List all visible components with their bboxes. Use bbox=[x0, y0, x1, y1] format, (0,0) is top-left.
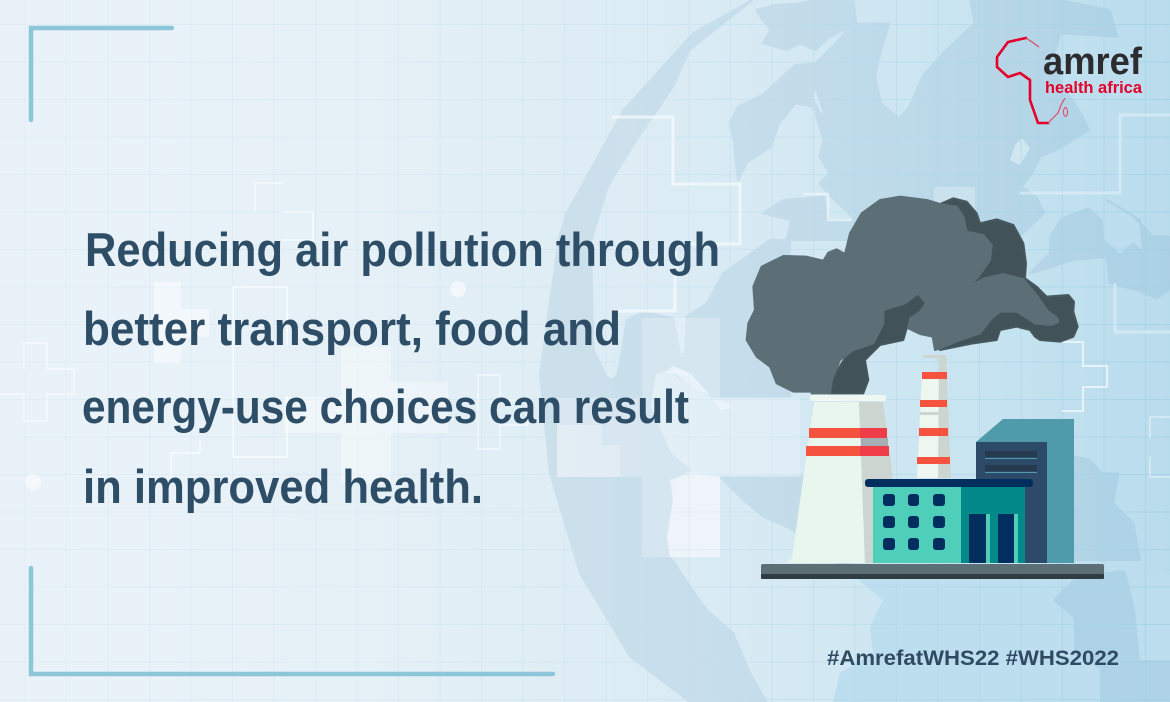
ireland and britain bbox=[1010, 138, 1030, 165]
logo: amref health africa bbox=[997, 38, 1143, 123]
headline text: in improved health. bbox=[83, 460, 483, 513]
logo: amref health africa: health africa bbox=[1045, 78, 1143, 97]
tower: wide cooling tower bbox=[786, 395, 893, 563]
globe map bbox=[540, 0, 1170, 702]
corner bracket: bottom left bbox=[31, 568, 553, 674]
logo: amref health africa: amref bbox=[1043, 41, 1142, 83]
ocean region lower right bbox=[833, 575, 1170, 702]
smoke: dark layer bbox=[830, 198, 1078, 393]
building: back block bbox=[976, 419, 1074, 563]
medical cross pattern bbox=[0, 115, 1170, 557]
factory illustration bbox=[747, 197, 1104, 579]
headline text: energy-use choices can result bbox=[82, 380, 689, 433]
smoke cloud bbox=[747, 197, 1078, 393]
south america light patch bbox=[667, 473, 720, 557]
smoke: main layer bbox=[747, 197, 1058, 393]
tower: slim chimney bbox=[917, 355, 951, 478]
headline text bbox=[82, 223, 720, 513]
continents bbox=[540, 0, 1170, 702]
headline text: better transport, food and bbox=[83, 302, 621, 355]
ground platform bbox=[761, 564, 1104, 579]
hashtags: #AmrefatWHS22 #WHS2022 bbox=[827, 647, 1119, 670]
building: front with windows bbox=[865, 479, 1033, 563]
headline text: Reducing air pollution through bbox=[85, 223, 720, 276]
caribbean islands bbox=[665, 366, 733, 410]
corner bracket: top left bbox=[31, 28, 172, 120]
